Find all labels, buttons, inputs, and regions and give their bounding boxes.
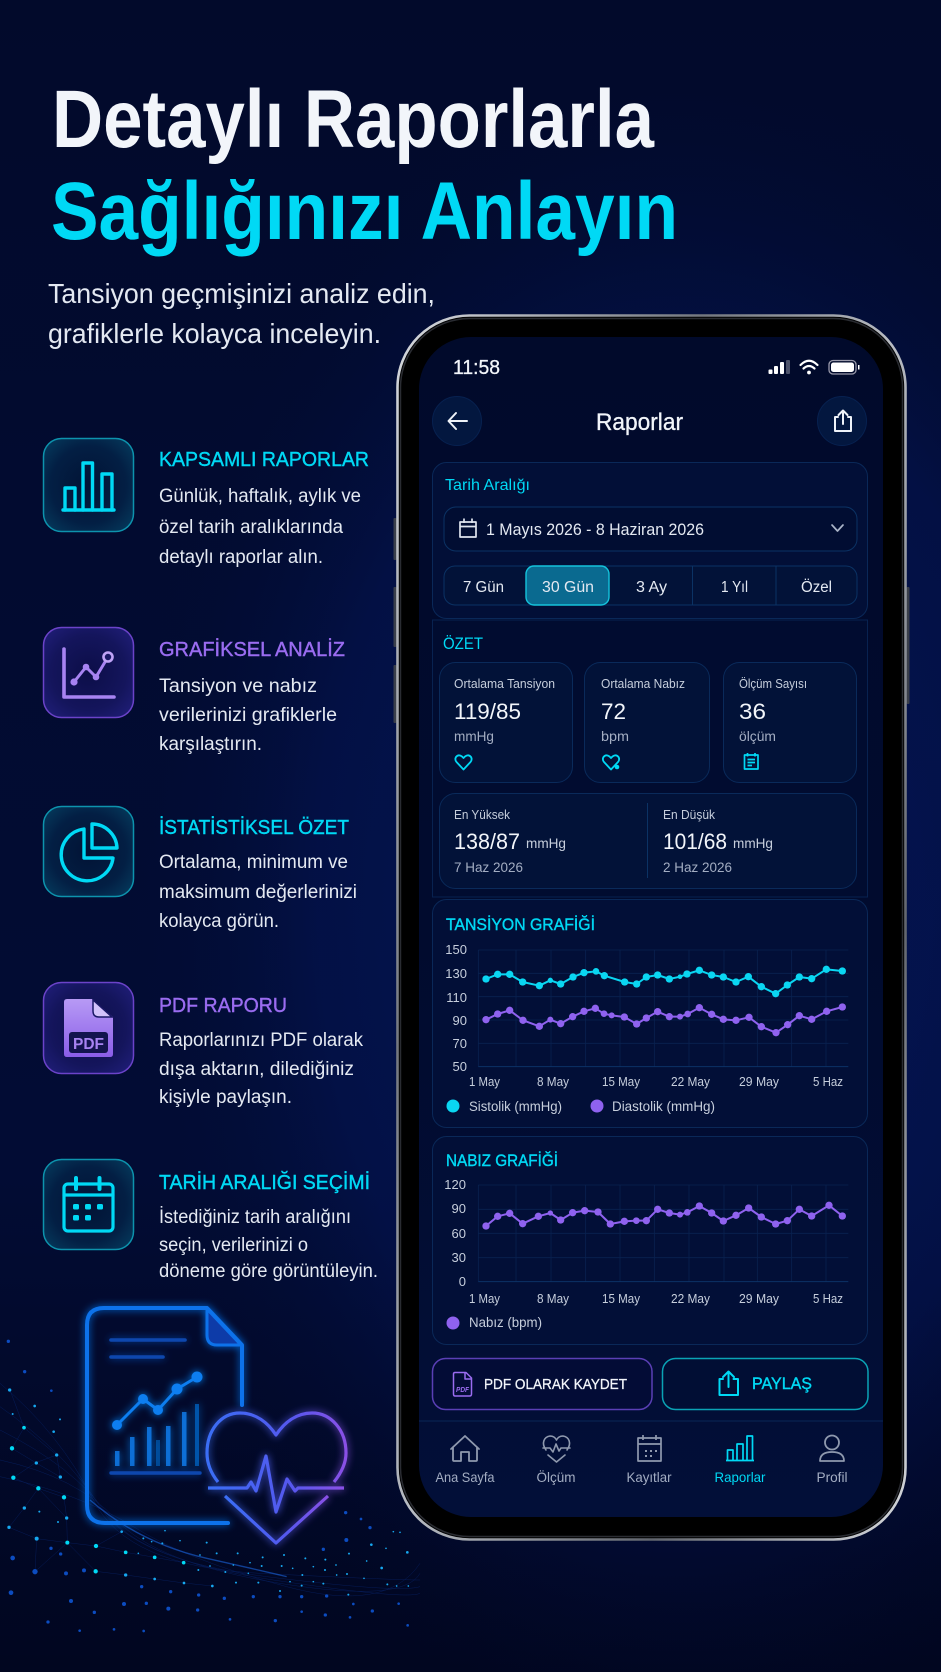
feature text <box>159 676 337 755</box>
feature text <box>159 852 357 932</box>
bottom navigation <box>419 1421 883 1485</box>
feature text: Günlük, haftalık, aylık ve <box>159 486 361 507</box>
card: average pulse: bpm <box>601 728 629 744</box>
feature: Kapsamlı Raporlar <box>44 438 369 568</box>
card: highest and lowest: 2 Haz 2026 <box>663 860 732 875</box>
y axis labels: 0 <box>459 1274 466 1289</box>
nav: measurement <box>536 1436 576 1485</box>
decorative particle network <box>0 1340 420 1632</box>
feature: Tarih Aralığı Seçimi <box>44 1160 378 1282</box>
x axis labels: 22 May <box>671 1075 711 1089</box>
title: Sağlığınızı Anlayın <box>51 166 678 257</box>
y axis labels <box>445 942 467 1074</box>
y axis labels: 90 <box>452 1201 466 1216</box>
button: save as pdf: PDF OLARAK KAYDET <box>484 1376 627 1393</box>
feature text: İstediğiniz tarih aralığını <box>159 1207 351 1228</box>
y axis labels <box>444 1177 466 1289</box>
icon: bar chart <box>44 438 134 532</box>
feature text: kolayca görün. <box>159 911 279 932</box>
feature heading: GRAFİKSEL ANALİZ <box>159 638 345 661</box>
status bar <box>453 357 860 379</box>
card: average pressure: Ortalama Tansiyon <box>454 676 555 691</box>
panel: pulse chart <box>432 1136 868 1344</box>
card: highest and lowest: 101/68 <box>663 829 727 854</box>
x axis labels <box>469 1075 843 1089</box>
x axis labels: 1 May <box>469 1075 501 1089</box>
header share button <box>818 396 866 446</box>
feature text <box>159 1207 378 1282</box>
icon: pdf document: PDF <box>73 1036 104 1053</box>
y axis labels: 130 <box>445 966 467 981</box>
card: highest and lowest: En Düşük <box>663 807 715 822</box>
feature: Grafiksel Analiz <box>44 628 345 755</box>
chart legend: Diastolik (mmHg) <box>612 1099 715 1114</box>
icon: line chart <box>44 628 134 718</box>
phone side buttons <box>394 518 910 723</box>
nav: profile <box>816 1436 848 1485</box>
feature text: dışa aktarın, dilediğiniz <box>159 1059 354 1080</box>
card: average pulse: Ortalama Nabız <box>601 676 685 691</box>
feature: PDF Raporu <box>44 982 363 1108</box>
card: highest and lowest: mmHg <box>526 835 566 851</box>
feature text: karşılaştırın. <box>159 734 262 755</box>
chart heading: NABIZ GRAFİĞİ <box>446 1151 558 1170</box>
y axis labels: 110 <box>446 990 467 1005</box>
line chart: pulse <box>478 1185 848 1282</box>
button: share: PAYLAŞ <box>752 1374 812 1393</box>
nav: reports (active): Raporlar <box>714 1469 766 1485</box>
period selector: 1 Yıl <box>721 579 748 596</box>
feature text: Ortalama, minimum ve <box>159 852 348 873</box>
nav: reports (active) <box>714 1436 766 1485</box>
x axis labels: 29 May <box>739 1075 780 1089</box>
nav: records <box>626 1435 672 1485</box>
nav: home: Ana Sayfa <box>436 1469 495 1485</box>
chart legend <box>446 1099 715 1114</box>
feature text: Tansiyon ve nabız <box>159 676 317 697</box>
title: Detaylı Raporlarla <box>52 74 655 165</box>
feature heading: TARİH ARALIĞI SEÇİMİ <box>159 1171 370 1194</box>
feature text: maksimum değerlerinizi <box>159 882 357 903</box>
card: highest and lowest: 138/87 <box>454 829 520 854</box>
card: highest and lowest <box>440 794 856 888</box>
date dropdown: 1 Mayıs 2026 - 8 Haziran 2026 <box>486 520 704 539</box>
period selector <box>444 566 857 605</box>
y axis labels: 30 <box>452 1250 466 1265</box>
feature text: döneme göre görüntüleyin. <box>159 1261 378 1282</box>
x axis labels: 8 May <box>537 1292 570 1306</box>
button: save as pdf <box>432 1358 652 1410</box>
x axis labels: 15 May <box>602 1075 641 1089</box>
card: measurement count: ölçüm <box>739 728 776 744</box>
feature text <box>159 486 361 568</box>
y axis labels: 90 <box>453 1013 467 1028</box>
phone <box>394 316 910 1540</box>
x axis labels: 1 May <box>469 1292 501 1306</box>
chart heading: TANSİYON GRAFİĞİ <box>446 915 595 934</box>
x axis labels: 29 May <box>739 1292 780 1306</box>
feature text: özel tarih aralıklarında <box>159 517 343 538</box>
period selector: Özel <box>801 578 832 596</box>
label: date range: Tarih Aralığı <box>445 477 530 494</box>
subtitle: grafiklerle kolayca inceleyin. <box>48 318 381 349</box>
card: measurement count: 36 <box>739 699 766 724</box>
feature heading: PDF RAPORU <box>159 995 287 1017</box>
x axis labels: 15 May <box>602 1292 641 1306</box>
feature text: seçin, verilerinizi o <box>159 1235 308 1256</box>
x axis labels <box>469 1292 843 1306</box>
header back button <box>432 396 482 446</box>
card: average pulse: 72 <box>601 699 626 724</box>
icon: pie chart <box>44 806 134 896</box>
feature text <box>159 1030 363 1108</box>
panel: summary <box>432 620 868 897</box>
feature text: detaylı raporlar alın. <box>159 547 323 568</box>
phone frame <box>398 316 906 1540</box>
card: highest and lowest: mmHg <box>733 835 773 851</box>
status icons <box>768 360 860 374</box>
card: measurement count: Ölçüm Sayısı <box>739 676 807 691</box>
date dropdown <box>444 507 857 551</box>
card: measurement count <box>724 662 856 782</box>
x axis labels: 5 Haz <box>813 1075 843 1089</box>
chart legend: Sistolik (mmHg) <box>469 1099 562 1114</box>
feature text: verilerinizi grafiklerle <box>159 705 337 726</box>
feature text: kişiyle paylaşın. <box>159 1087 292 1108</box>
button: share <box>662 1358 868 1410</box>
card: average pressure <box>440 662 572 782</box>
line chart: systolic and diastolic <box>478 950 848 1067</box>
subtitle: Tansiyon geçmişinizi analiz edin, <box>48 278 435 309</box>
card: average pressure: mmHg <box>454 728 494 744</box>
subtitle <box>48 278 435 349</box>
summary heading: ÖZET <box>443 635 483 653</box>
y axis labels: 60 <box>452 1226 466 1241</box>
period selector: 3 Ay <box>636 579 667 596</box>
feature: İstatistiksel Özet <box>44 806 357 932</box>
illustration: heart with pulse <box>207 1413 346 1543</box>
card: highest and lowest: 7 Haz 2026 <box>454 860 523 875</box>
y axis labels: 150 <box>445 942 467 957</box>
phone screen <box>419 337 883 1517</box>
card: highest and lowest: En Yüksek <box>454 807 510 822</box>
illustration: report document <box>87 1308 242 1523</box>
nav: records: Kayıtlar <box>626 1469 672 1485</box>
period selector: 30 Gün <box>542 579 594 596</box>
icon: pdf document <box>44 982 134 1074</box>
chart legend: Nabız (bpm) <box>469 1315 542 1330</box>
y axis labels: 50 <box>453 1059 467 1074</box>
x axis labels: 22 May <box>671 1292 711 1306</box>
y axis labels: 70 <box>453 1036 467 1051</box>
feature text: Raporlarınızı PDF olarak <box>159 1030 363 1051</box>
card: average pressure: 119/85 <box>454 699 521 724</box>
x axis labels: 5 Haz <box>813 1292 843 1306</box>
button: save as pdf: PDF <box>456 1387 470 1394</box>
panel: blood pressure chart <box>432 900 868 1128</box>
x axis labels: 8 May <box>537 1075 570 1089</box>
period selector: 7 Gün <box>463 579 504 596</box>
icon: calendar <box>44 1160 134 1250</box>
header title: Raporlar <box>596 409 683 436</box>
time: 11:58 <box>453 357 500 379</box>
nav: measurement: Ölçüm <box>536 1468 576 1485</box>
feature heading: İSTATİSTİKSEL ÖZET <box>159 816 349 839</box>
nav: profile: Profil <box>816 1469 848 1485</box>
feature heading: KAPSAMLI RAPORLAR <box>159 449 369 471</box>
card: average pulse <box>584 662 710 782</box>
title <box>51 74 678 257</box>
panel: date range <box>432 462 868 618</box>
y axis labels: 120 <box>444 1177 466 1192</box>
nav: home <box>436 1436 495 1485</box>
